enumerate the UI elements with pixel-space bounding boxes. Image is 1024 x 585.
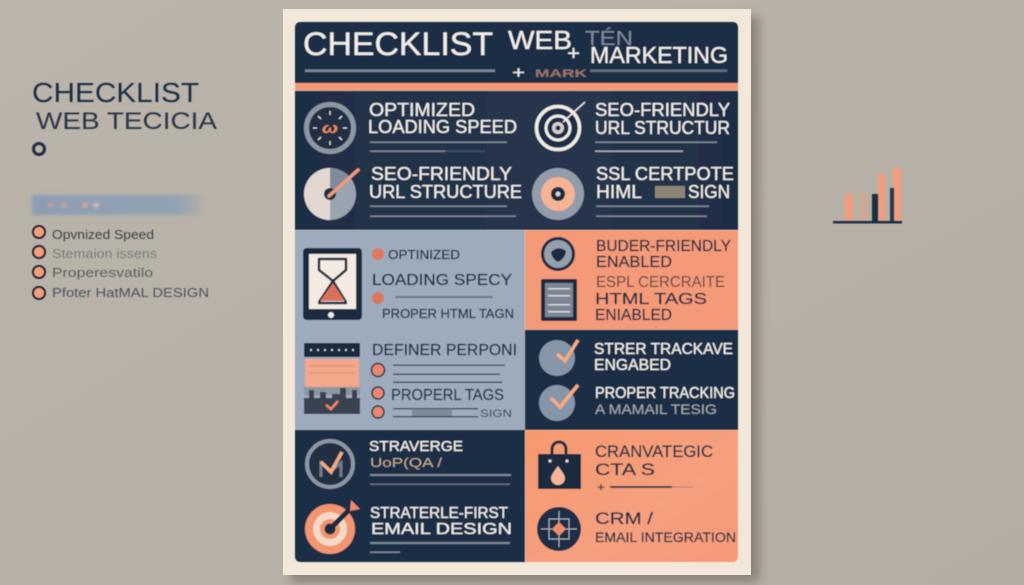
poster — [283, 9, 751, 575]
text: buder-friendly enabled — [596, 238, 731, 271]
subtitle rule left — [305, 70, 495, 72]
sidebar checklist: Pfoter HatMAL DESIGN — [52, 285, 209, 300]
sidebar checklist: Stemaion issens — [52, 246, 158, 261]
text: ssl certificate html tags enabled: ESPL CERCRAITE — [596, 274, 725, 291]
bullet list: SIGN — [480, 408, 512, 420]
text: stravergic: UoP(QA / — [370, 455, 442, 470]
text: strategic ctas: CRANVATEGIC — [595, 442, 713, 461]
text: strategic ctas: CTA S — [595, 460, 655, 479]
icon: check circle two — [539, 385, 578, 421]
text: ssl certificate html design: SSL CERTPOTE — [596, 164, 734, 184]
sidebar title: WEB TECICIA — [36, 108, 217, 135]
text: seo-friendly url structure — [369, 164, 522, 217]
text: proper tracking: A MAMAIL TESIG — [595, 401, 717, 417]
icon: speed gauge: ω — [322, 120, 339, 137]
icon: bag lock — [538, 442, 581, 489]
text: optimized loading speed: LOADING SPEED — [368, 117, 517, 137]
sidebar title: CHECKLIST — [32, 77, 199, 108]
icon: ring badge — [542, 238, 574, 270]
text: proper tracking — [595, 385, 735, 417]
icon: check circle one — [539, 340, 578, 376]
subtitle mark: MARK — [535, 68, 587, 80]
text: optimized loading speed — [368, 100, 517, 152]
icon: dial — [304, 168, 358, 220]
mini bar chart — [845, 168, 901, 221]
sidebar blurred bar — [32, 195, 204, 215]
title WEB: WEB — [508, 25, 572, 55]
text: strer trackave engabed: STRER TRACKAVE — [594, 341, 733, 358]
text: proper tracking: PROPER TRACKING — [595, 385, 735, 402]
text: buder-friendly enabled: ENABLED — [596, 254, 672, 271]
text: stravergic — [369, 438, 511, 485]
panel: top navy — [295, 91, 738, 230]
text: seo-friendly url structure: SEO-FRIENDLY — [371, 164, 512, 184]
bullet list — [372, 364, 512, 420]
text: proper html tags: PROPER HTML TAGN — [382, 306, 514, 321]
panel: orange middle — [525, 230, 738, 330]
text: proper html tags — [372, 292, 514, 321]
text: strategic first email design: STRATERLE-FIRST — [370, 505, 508, 522]
text: seo-friendly url structur: SEO-FRIENDLY — [595, 100, 730, 120]
sidebar checklist: Opvnized Speed — [52, 227, 154, 242]
icon: target — [536, 102, 585, 150]
icon: crm grid — [537, 507, 581, 551]
header panel — [295, 22, 738, 91]
title: CHECKLIST — [303, 26, 493, 62]
text: strategic ctas — [595, 442, 713, 494]
icon: check m badge — [307, 441, 353, 487]
panel: orange bottom — [525, 430, 738, 562]
text: ssl certificate html design — [596, 164, 734, 217]
title marketing: MARKETING — [590, 42, 728, 68]
panel: navy middle — [525, 330, 738, 430]
sidebar checklist: Properesvatilo — [52, 265, 153, 280]
text: stravergic: STRAVERGE — [369, 438, 463, 455]
text: strer trackave engabed — [594, 341, 733, 374]
text: crm email integration: EMAIL INTEGRATION — [595, 529, 736, 545]
text: strategic ctas: + — [597, 480, 605, 494]
text: strategic first email design: EMAIL DESIGN — [371, 521, 512, 538]
text: strategic first email design — [370, 505, 512, 553]
icon: donut — [532, 168, 584, 220]
icon: document — [541, 279, 577, 321]
icon: browser page — [304, 343, 360, 414]
panel: navy bottom — [295, 430, 525, 562]
bullet list: PROPERL TAGS — [391, 387, 504, 404]
text: ssl certificate html tags enabled — [595, 274, 725, 324]
text: ssl certificate html tags enabled: ENIABLED — [595, 307, 672, 324]
sidebar checklist — [33, 226, 209, 300]
text: optimized loading speed: OPTIMIZED — [369, 100, 475, 120]
text: buder-friendly enabled: BUDER-FRIENDLY — [596, 238, 731, 255]
subtitle plus: + — [512, 63, 525, 82]
icon: orange target — [305, 500, 360, 554]
text: optimized: OPTINIZED — [388, 247, 460, 262]
title faded word: TÉN — [585, 27, 633, 50]
text: ssl certificate html tags enabled: HTML TAGS — [595, 291, 707, 308]
poster shadow — [291, 17, 759, 582]
left sidebar — [32, 77, 217, 300]
sidebar ring icon — [34, 144, 44, 154]
text: definer perpon: DEFINER PERPONI — [372, 342, 517, 359]
icon: tablet hourglass — [303, 248, 362, 320]
text: seo-friendly url structur — [595, 100, 730, 152]
subtitle rule right — [590, 70, 727, 72]
text: ssl certificate html design: HIML — [596, 182, 642, 202]
text: crm email integration — [595, 509, 736, 545]
text: crm email integration: CRM / — [595, 509, 653, 528]
text: seo-friendly url structure: URL STRUCTURE — [369, 182, 522, 202]
icon: speed gauge — [306, 104, 354, 152]
text: strer trackave engabed: ENGABED — [594, 357, 671, 374]
title plus: + — [567, 43, 580, 65]
panel: blue — [295, 230, 525, 430]
orange strip — [295, 83, 738, 91]
mini chart dark bars and axis — [833, 188, 902, 224]
text: seo-friendly url structur: URL STRUCTUR — [595, 118, 730, 138]
text: loading specy: LOADING SPECY — [372, 272, 512, 289]
text: ssl certificate html design: SIGN — [688, 182, 730, 202]
sidebar title — [32, 77, 217, 135]
